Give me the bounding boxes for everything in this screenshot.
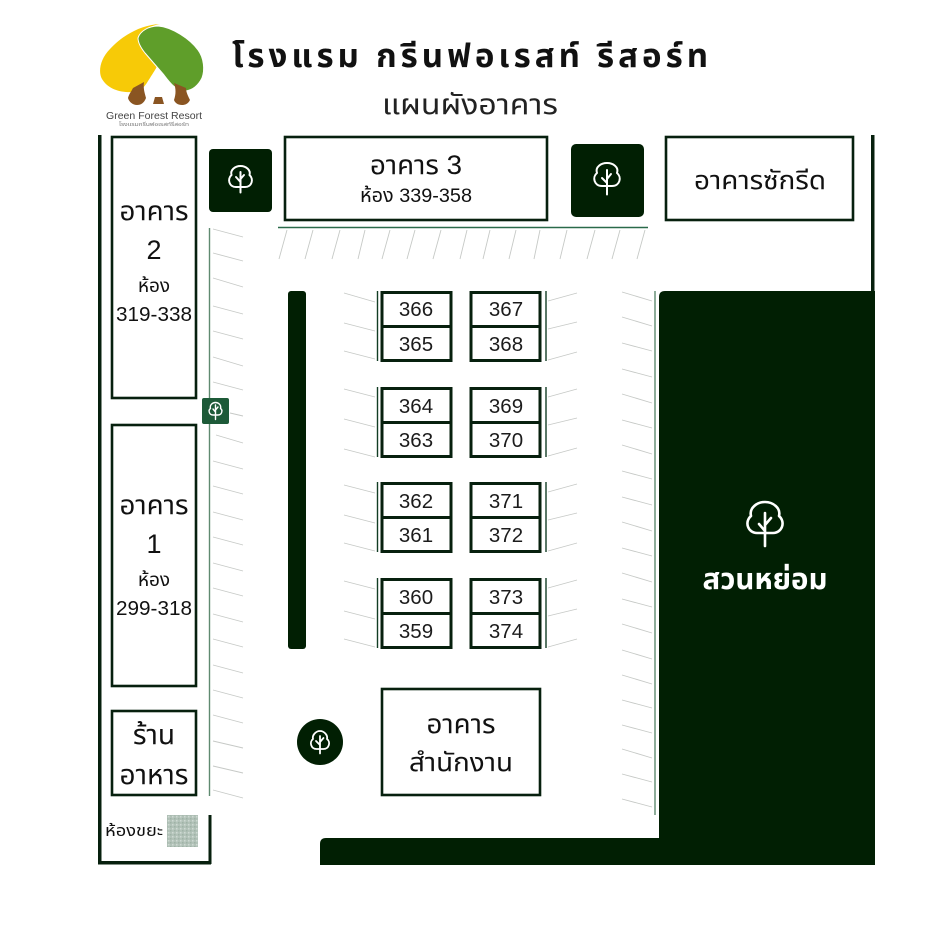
- building 1: [112, 425, 196, 686]
- icon: tree, round: [297, 719, 343, 765]
- building 1: ห้อง: [138, 568, 170, 591]
- building 2: 2: [146, 235, 162, 265]
- site boundary walls: [98, 135, 874, 864]
- rooms 367 368: 367: [489, 298, 523, 321]
- parking: top row: [278, 228, 648, 259]
- garden label: สวนหย่อม: [702, 564, 828, 596]
- rooms 373 374: [471, 578, 546, 648]
- restaurant: ร้าน: [133, 719, 175, 750]
- rooms 366 365: [378, 291, 451, 361]
- waste room: ห้องขยะ: [105, 823, 163, 840]
- rooms 362 361: 362: [399, 490, 433, 513]
- rooms 360 359: 360: [399, 586, 433, 609]
- rooms 373 374: 374: [489, 620, 523, 643]
- office building: อาคาร: [426, 709, 496, 739]
- office building: สำนักงาน: [409, 747, 513, 777]
- rooms 369 370: [471, 387, 546, 457]
- icon: tree, top left square: [209, 149, 272, 212]
- rooms 364 363: 363: [399, 429, 433, 452]
- parking: central right: [548, 293, 577, 647]
- parking: left row: [210, 228, 243, 798]
- rooms 366 365: 365: [399, 333, 433, 356]
- building 1: อาคาร: [120, 490, 188, 520]
- building 3: อาคาร 3: [370, 150, 462, 180]
- parking: central left: [344, 293, 375, 647]
- rooms 360 359: [378, 578, 451, 648]
- rooms 369 370: 370: [489, 429, 523, 452]
- title: โรงแรม กรีนฟอเรสท์ รีสอร์ท: [232, 37, 708, 74]
- laundry building: อาคารซักรีด: [694, 165, 826, 195]
- parking: right row: [622, 291, 655, 815]
- rooms 362 361: 361: [399, 524, 433, 547]
- waste room: [105, 815, 198, 847]
- building 3: ห้อง 339-358: [360, 184, 472, 207]
- logo: Green Forest Resort: [100, 24, 204, 128]
- subtitle: แผนผังอาคาร: [382, 89, 558, 121]
- building 2: อาคาร: [120, 196, 188, 226]
- rooms 373 374: 373: [489, 586, 523, 609]
- rooms 367 368: 368: [489, 333, 523, 356]
- building 1: 299-318: [116, 598, 192, 620]
- rooms 362 361: [378, 482, 451, 552]
- central planter bar: [288, 291, 306, 649]
- building 3: [285, 137, 547, 220]
- rooms 366 365: 366: [399, 298, 433, 321]
- laundry building: [666, 137, 853, 220]
- rooms 364 363: [378, 387, 451, 457]
- icon: tree, garden: [747, 502, 783, 546]
- logo: Green Forest Resort: โรงแรมกรีนฟอเรสท์รีสอร์ท: [119, 121, 189, 128]
- rooms 371 372: [471, 482, 546, 552]
- restaurant: อาหาร: [120, 759, 188, 790]
- building 2: 319-338: [116, 304, 192, 326]
- rooms 364 363: 364: [399, 395, 433, 418]
- office building: [382, 689, 540, 795]
- rooms 371 372: 371: [489, 490, 523, 513]
- building 2: ห้อง: [138, 274, 170, 297]
- rooms 367 368: [471, 291, 546, 361]
- logo: Green Forest Resort: Green Forest Resort: [106, 110, 202, 122]
- icon: tree, top right square: [571, 144, 644, 217]
- restaurant: [112, 711, 196, 795]
- building 2: [112, 137, 196, 398]
- building 1: 1: [146, 529, 162, 559]
- icon: tree, small square: [202, 398, 229, 424]
- garden area: dark green block: [320, 291, 875, 865]
- rooms 369 370: 369: [489, 395, 523, 418]
- rooms 371 372: 372: [489, 524, 523, 547]
- rooms 360 359: 359: [399, 620, 433, 643]
